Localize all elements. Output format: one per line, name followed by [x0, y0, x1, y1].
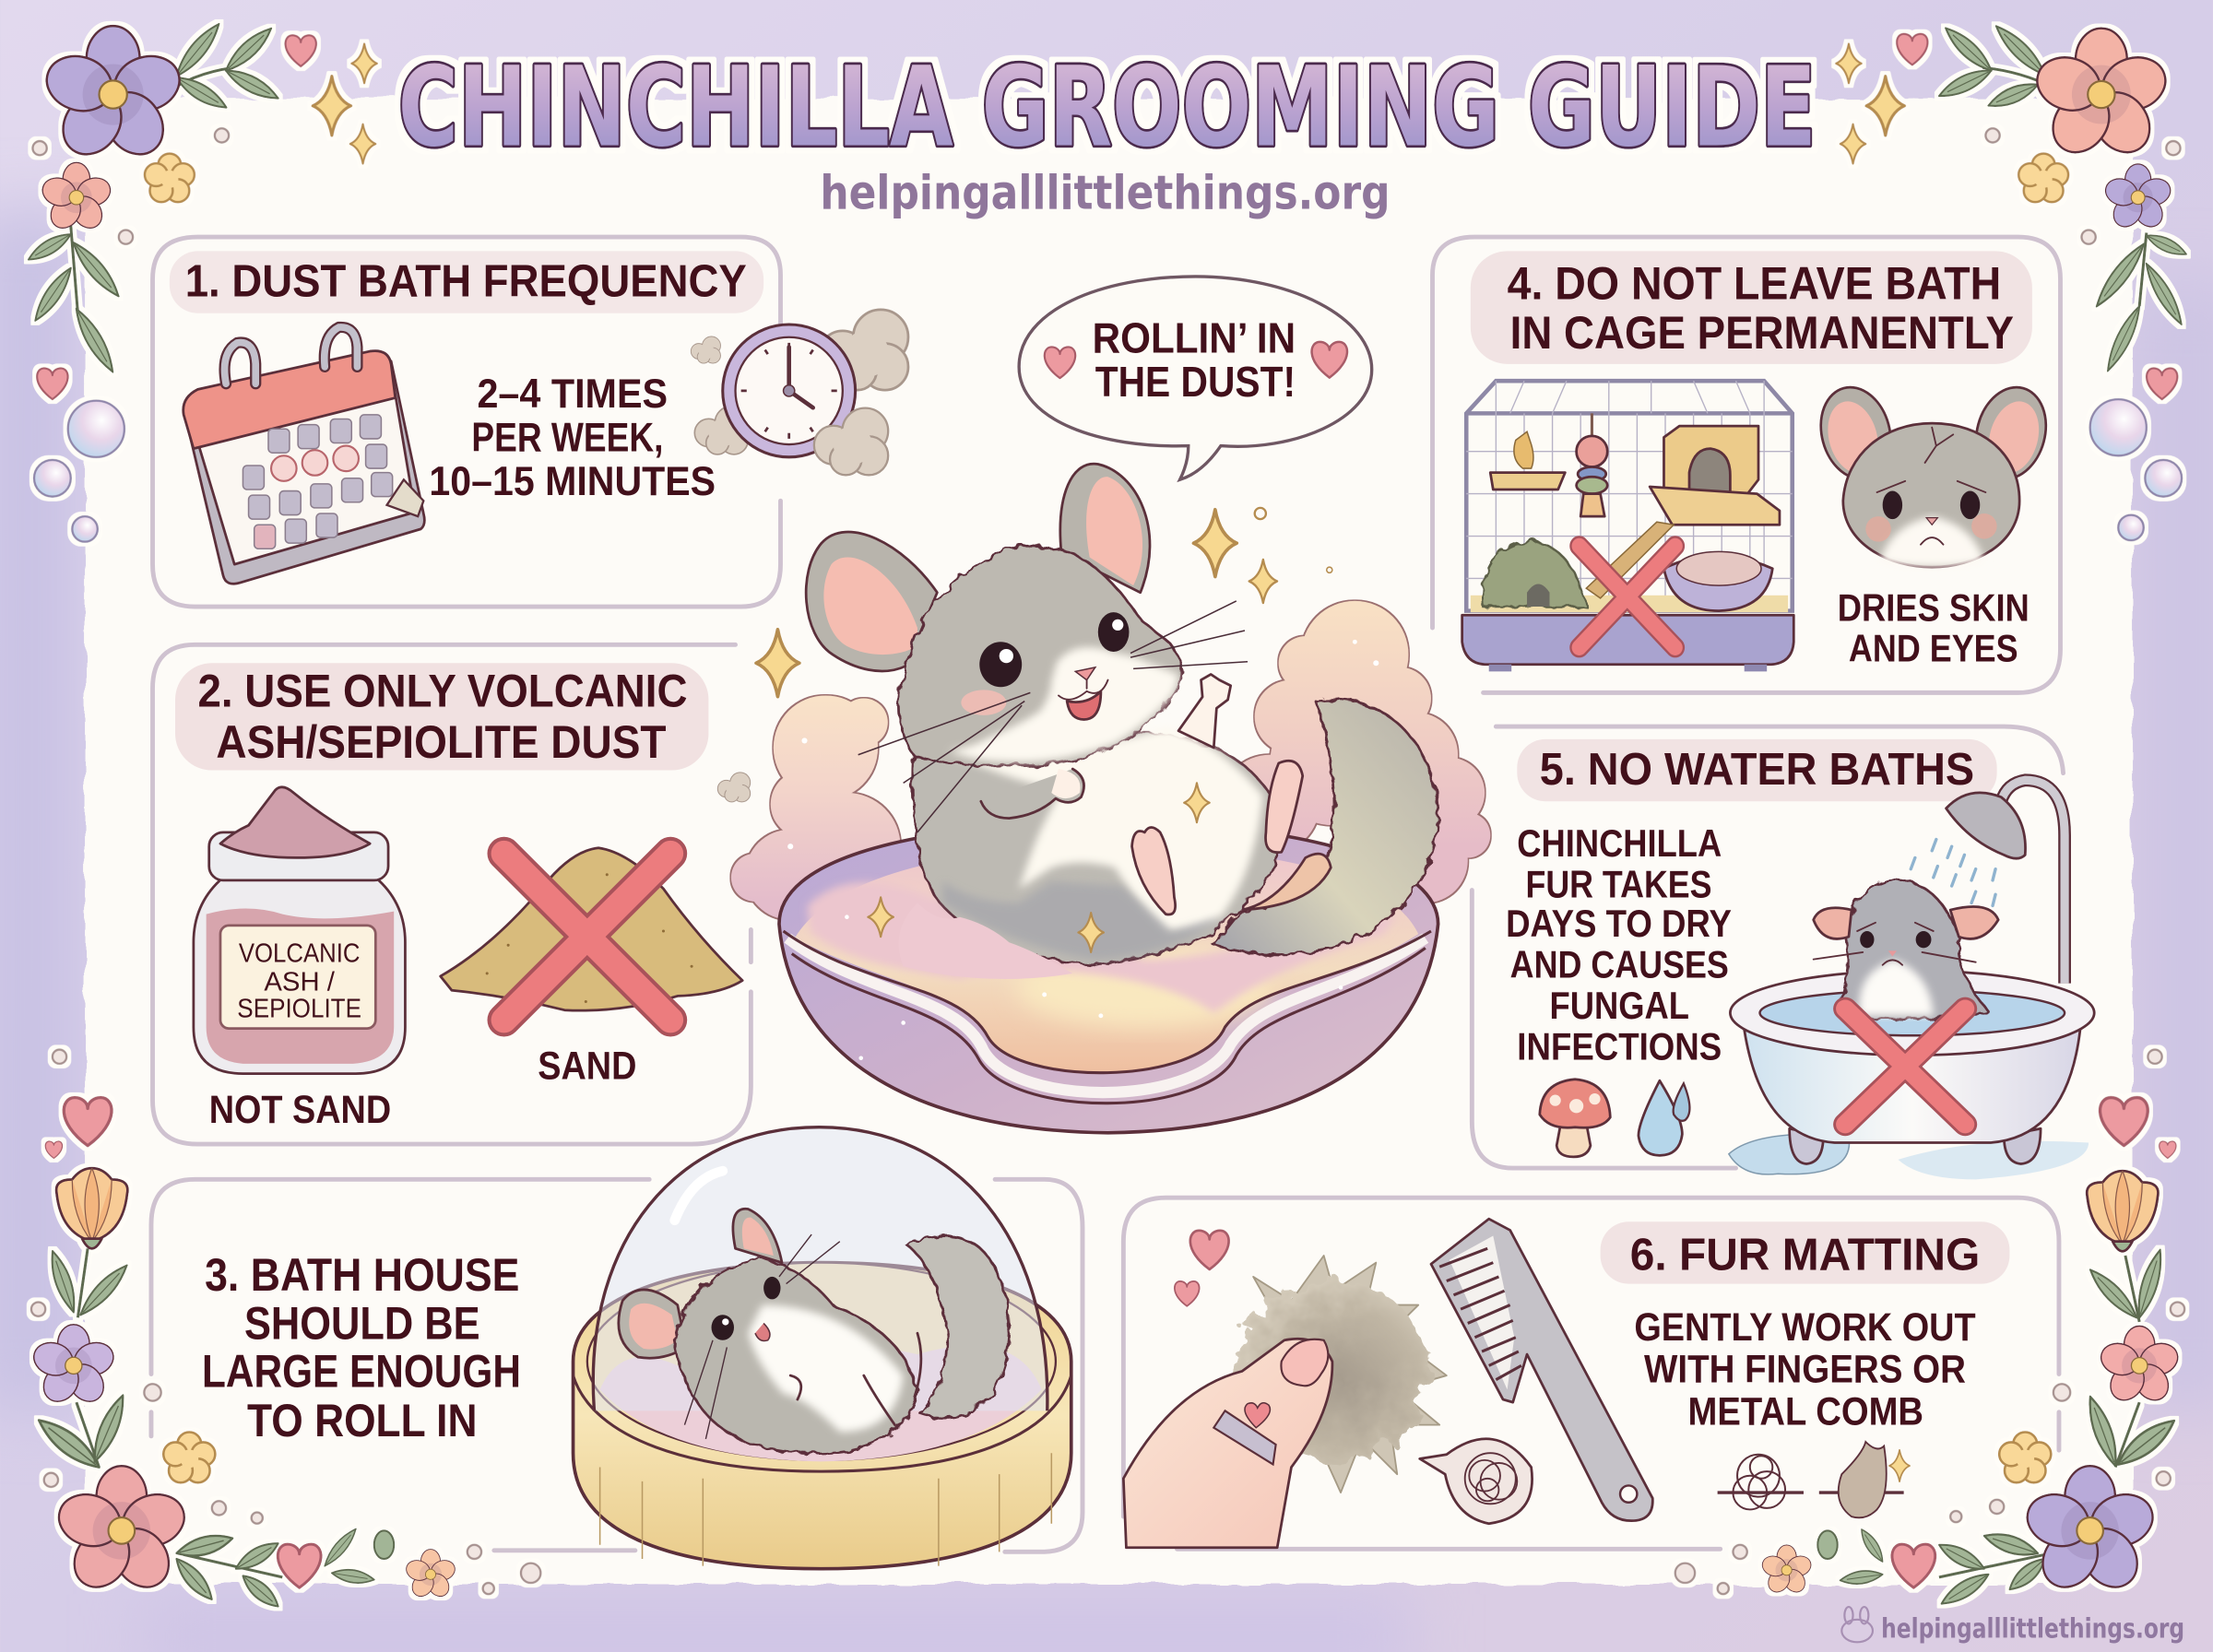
body text 5: CHINCHILLA	[1517, 822, 1722, 865]
icon: clock with dust clouds	[691, 310, 908, 475]
body	[913, 728, 1277, 965]
body text 6	[1634, 1305, 1976, 1434]
jar label text: ASH /	[264, 967, 336, 997]
icon: dust jar	[194, 787, 405, 1074]
jar label text: SEPIOLITE	[237, 994, 361, 1023]
heading 4: IN CAGE PERMANENTLY	[1510, 306, 2014, 359]
footer url with bunny mark	[1841, 1607, 2184, 1645]
heading 3: TO ROLL IN	[247, 1394, 477, 1446]
body text 1	[429, 372, 716, 504]
heading 2	[175, 663, 708, 771]
body text 1: PER WEEK,	[471, 416, 663, 461]
illustration: bath house dome	[574, 1127, 1071, 1569]
body text 1: 10–15 MINUTES	[429, 459, 716, 504]
heading 6: 6. FUR MATTING	[1630, 1230, 1980, 1280]
icon: water drops	[1639, 1080, 1689, 1155]
heading 5: 5. NO WATER BATHS	[1540, 745, 1974, 795]
heading 4: 4. DO NOT LEAVE BATH	[1508, 256, 2001, 309]
small chinchilla	[619, 1209, 1010, 1453]
sparkles and dots	[717, 508, 1332, 952]
arm, feet	[981, 674, 1303, 914]
body text 5: INFECTIONS	[1517, 1025, 1722, 1068]
panel 4: do not leave bath	[1433, 237, 2060, 692]
heading 4	[1471, 251, 2032, 364]
tail	[1213, 700, 1438, 954]
head	[858, 547, 1248, 832]
dust bowl	[779, 640, 1438, 1133]
icon: shower	[1911, 780, 2065, 984]
label: dries skin: DRIES SKIN	[1838, 586, 2030, 629]
hearts	[1175, 1231, 1229, 1306]
icon: hand holding matted fur	[1123, 1256, 1447, 1548]
icon: tub with wet chinchilla	[1729, 879, 2094, 1179]
label: sand: SAND	[538, 1044, 636, 1089]
dust cloud right	[1221, 601, 1490, 915]
sparkles, hearts and small flowers near title	[145, 34, 2068, 202]
jar label text	[237, 939, 361, 1023]
body text 5	[1506, 822, 1732, 1068]
dust cloud left	[731, 695, 901, 939]
panel 5: no water baths	[1472, 726, 2094, 1179]
icon: sand pile crossed	[441, 848, 742, 1020]
heading 2: 2. USE ONLY VOLCANIC	[197, 665, 687, 717]
panel 2: volcanic ash dust	[153, 644, 751, 1144]
label: dries skin: AND EYES	[1849, 628, 2018, 670]
heading 3: 3. BATH HOUSE	[205, 1248, 519, 1301]
corner decoration: top right	[1936, 21, 2189, 373]
heading 2: ASH/SEPIOLITE DUST	[216, 715, 667, 768]
body text 5: FUR TAKES	[1526, 863, 1712, 905]
label: not sand: NOT SAND	[209, 1088, 391, 1132]
illustration: main chinchilla in dust bath	[717, 464, 1490, 1133]
corner decoration: bottom left	[30, 1168, 457, 1612]
icon: sad chinchilla face	[1811, 380, 2055, 567]
corner decoration: bottom right	[1759, 1171, 2182, 1610]
heading 3	[202, 1248, 521, 1446]
panel 1: dust bath frequency	[153, 237, 780, 607]
speech bubble: THE DUST!	[1095, 358, 1296, 406]
jar label text: VOLCANIC	[239, 939, 360, 969]
heading 3: LARGE ENOUGH	[202, 1344, 521, 1397]
body text 6: METAL COMB	[1687, 1390, 1923, 1434]
panel 6: fur matting	[1123, 1198, 2059, 1549]
icon: mushroom	[1540, 1080, 1610, 1157]
subtitle url: helpingalllittlethings.org	[820, 165, 1391, 219]
corner decoration: top left	[25, 19, 281, 375]
body text 5: DAYS TO DRY	[1506, 903, 1732, 945]
body text 6: GENTLY WORK OUT	[1634, 1305, 1976, 1350]
hidden hind foot	[1242, 854, 1331, 910]
heading 1: 1. DUST BATH FREQUENCY	[185, 256, 747, 306]
right ear	[1060, 464, 1150, 593]
front dust mound	[899, 903, 1072, 979]
speech bubble	[1019, 277, 1372, 479]
heading 3: SHOULD BE	[244, 1296, 480, 1349]
icon: cage	[1462, 381, 1793, 671]
speech bubble: ROLLIN’ IN	[1093, 314, 1296, 362]
body text 1: 2–4 TIMES	[477, 372, 668, 417]
icons: tangled to smooth fur	[1718, 1442, 1910, 1517]
body text 6: WITH FINGERS OR	[1644, 1348, 1966, 1392]
callout: tangled fur	[1420, 1439, 1533, 1524]
label: dries skin	[1838, 586, 2030, 670]
icon: calendar	[183, 327, 424, 584]
body text 5: FUNGAL	[1550, 985, 1689, 1027]
body text 5: AND CAUSES	[1510, 944, 1729, 986]
left ear	[806, 532, 937, 671]
wet chinchilla	[1814, 879, 1998, 1019]
panel 3: bath house	[151, 1179, 1083, 1552]
icon: comb	[1431, 1219, 1652, 1521]
